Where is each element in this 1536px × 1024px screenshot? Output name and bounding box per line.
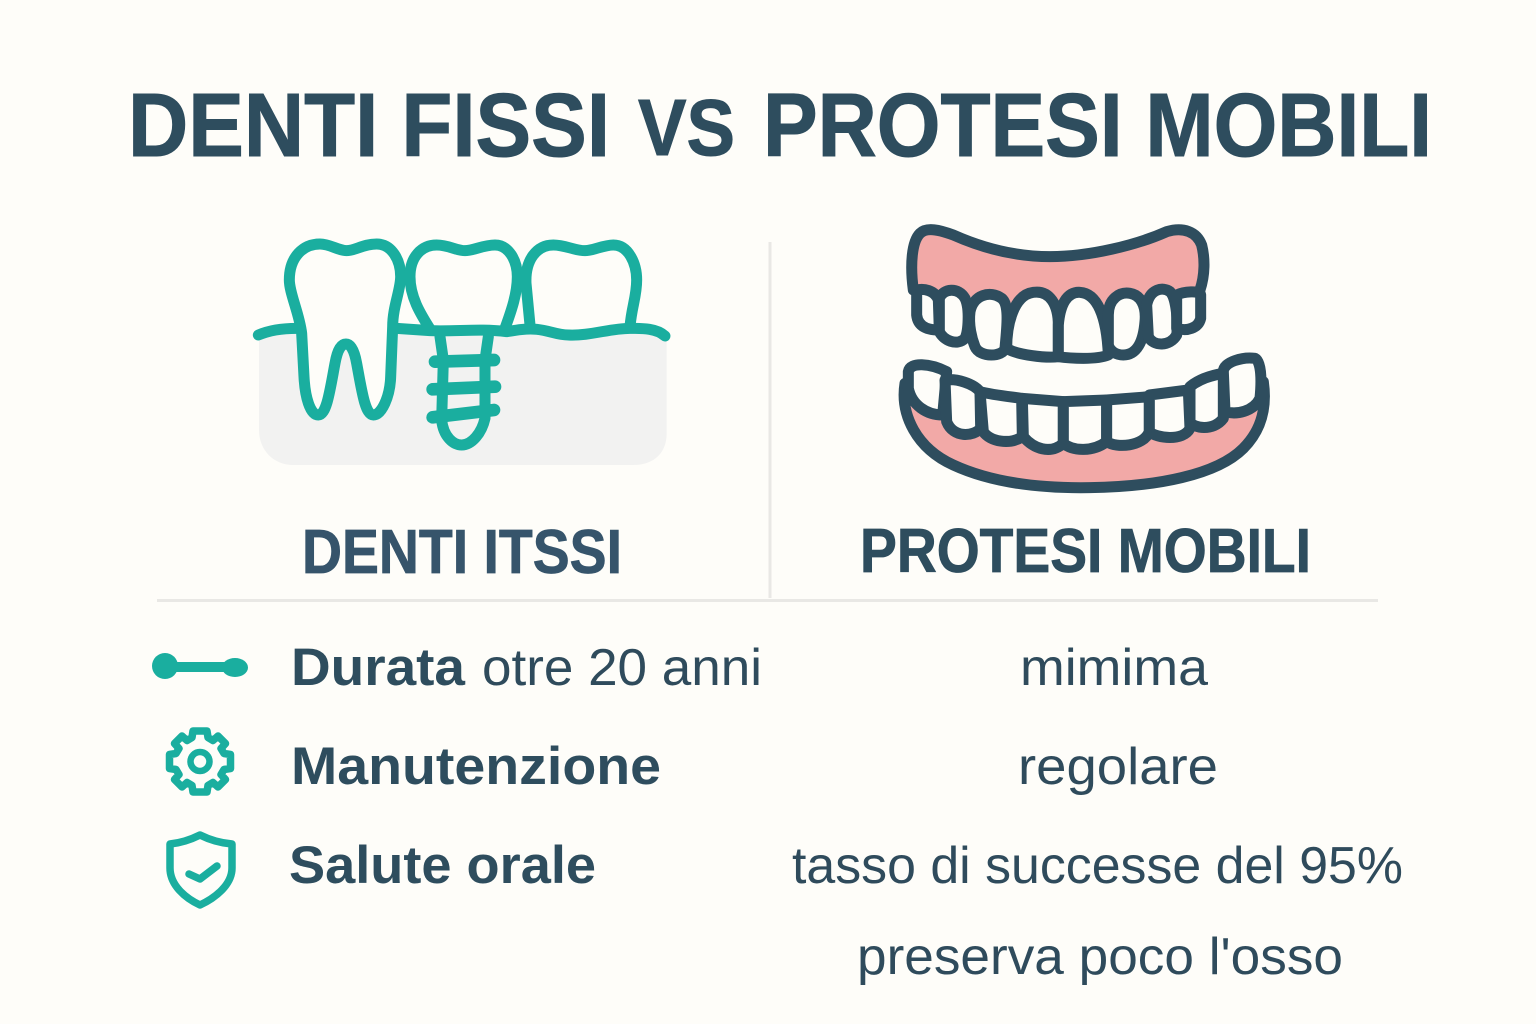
gum line <box>258 328 665 336</box>
lower gum fill <box>903 385 1265 488</box>
implant crown <box>410 245 517 330</box>
title: PROTESI MOBILI <box>763 76 1432 176</box>
row value: durata fissi: otre 20 anni <box>482 639 762 697</box>
implant threads <box>433 360 495 417</box>
icon: shield oral health <box>170 835 232 905</box>
row label: salute orale: Salute orale <box>289 836 596 895</box>
heading: fixed teeth: DENTI ITSSI <box>302 518 622 587</box>
upper teeth <box>917 289 1201 358</box>
title: DENTI FISSI <box>128 76 610 176</box>
lower gum outline <box>904 382 1264 488</box>
lower teeth <box>908 358 1261 449</box>
title: VS <box>638 83 735 172</box>
title <box>128 76 1432 176</box>
heading: removable denture: PROTESI MOBILI <box>860 517 1311 586</box>
row value: manutenzione mobili: regolare <box>1018 738 1218 796</box>
row label: durata: Durata <box>291 638 466 697</box>
icon: gear maintenance <box>170 731 230 792</box>
icon: removable denture <box>903 230 1265 488</box>
upper gum fill <box>912 230 1204 315</box>
upper gum outline <box>912 230 1204 290</box>
row label: manutenzione: Manutenzione <box>291 737 661 796</box>
icon: fixed teeth and implant <box>258 244 667 465</box>
row value: preserva osso: preserva poco l'osso <box>857 928 1343 986</box>
gum background <box>259 333 667 465</box>
natural tooth <box>289 244 401 415</box>
third tooth <box>526 245 637 327</box>
implant screw <box>440 337 488 445</box>
icon: bone duration <box>152 653 248 679</box>
row value: tasso di successo: tasso di successe del 95% <box>792 837 1403 895</box>
row value: durata mobili: mimima <box>1020 639 1208 697</box>
